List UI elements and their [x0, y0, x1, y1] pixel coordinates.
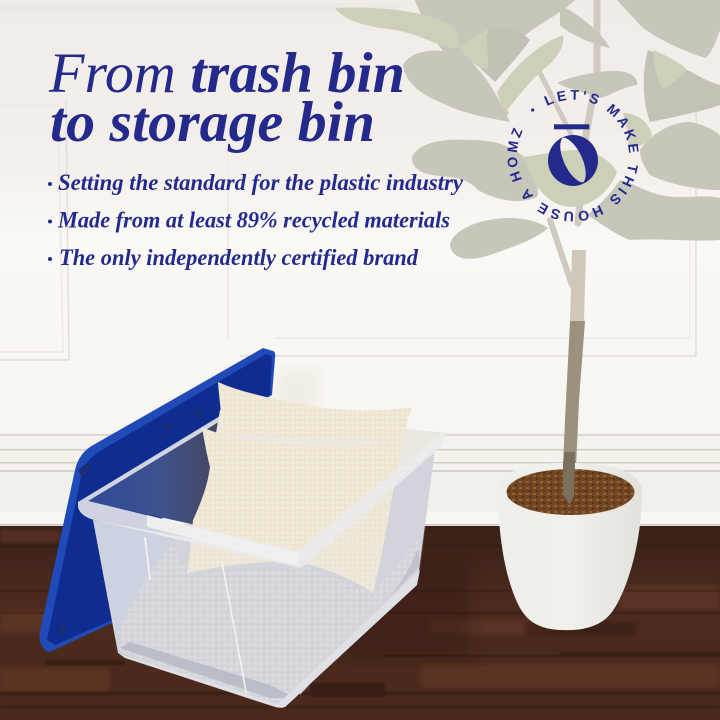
bin body base	[93, 450, 435, 707]
badge dot	[531, 108, 534, 112]
headline line 1: From trash bin	[48, 42, 405, 105]
bullet 2: Made from at least 89% recycled materials	[57, 208, 450, 232]
headline	[48, 42, 405, 154]
logo letter o	[548, 135, 598, 186]
circular slogan: LET'S MAKE THIS HOUSE A HOMZ	[507, 90, 639, 222]
pillow back	[218, 382, 412, 442]
blanket	[117, 540, 420, 702]
headline line 2: to storage bin	[50, 91, 375, 154]
storage bin lid	[40, 348, 275, 652]
wall background	[0, 0, 720, 530]
pillow front	[187, 427, 402, 593]
baseboard	[0, 433, 720, 528]
bullet list	[48, 170, 464, 270]
bullet 3: The only independently certified brand	[59, 245, 418, 270]
leaves dark	[403, 0, 720, 259]
trunk	[570, 250, 586, 321]
logo badge	[507, 90, 639, 222]
plant foliage	[335, 0, 720, 500]
bin interior dark side	[86, 418, 220, 525]
bin interior pale side	[200, 410, 447, 555]
bullet 1: Setting the standard for the plastic industry	[58, 170, 464, 195]
plant pot	[498, 462, 642, 630]
front wall frost	[93, 450, 435, 707]
leaves light green	[335, 8, 687, 207]
logo macron	[554, 124, 589, 129]
storage bin	[78, 382, 447, 708]
wood floor	[0, 526, 720, 720]
left face light area	[93, 520, 175, 633]
bin rim	[78, 416, 447, 568]
branches	[463, 0, 597, 285]
